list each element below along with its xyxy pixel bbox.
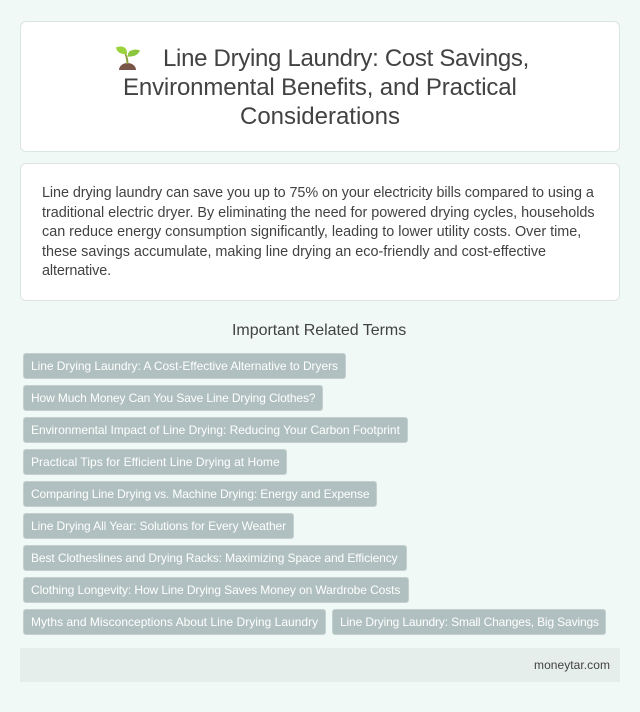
- tag: Environmental Impact of Line Drying: Reducing Your Carbon Footprint: [31, 423, 400, 437]
- tag: Best Clotheslines and Drying Racks: Maximizing Space and Efficiency: [31, 551, 398, 565]
- tag: Myths and Misconceptions About Line Drying Laundry: [31, 615, 318, 629]
- title: Considerations: [240, 103, 400, 130]
- tag: [23, 513, 294, 539]
- tag: [23, 449, 287, 475]
- icon: seedling: [116, 46, 140, 70]
- title: Environmental Benefits, and Practical: [123, 74, 517, 101]
- tag: [332, 609, 606, 635]
- summary text: Line drying laundry can save you up to 75% on your electricity bills compared to using a: [42, 185, 594, 201]
- tag: Clothing Longevity: How Line Drying Saves Money on Wardrobe Costs: [31, 583, 400, 597]
- summary card: [20, 163, 620, 301]
- footer: [20, 648, 620, 682]
- title card: [20, 21, 620, 152]
- summary text: alternative.: [42, 263, 111, 279]
- tag: [23, 609, 326, 635]
- tag: [23, 545, 407, 571]
- section heading: Important Related Terms: [232, 322, 406, 339]
- summary text: traditional electric dryer. By eliminating the need for powered drying cycles, households: [42, 204, 595, 220]
- title: Line Drying Laundry: Cost Savings,: [163, 45, 529, 72]
- footer: moneytar.com: [534, 658, 610, 672]
- summary text: these savings accumulate, making line drying an eco-friendly and cost-effective: [42, 244, 546, 260]
- tag: [23, 481, 377, 507]
- tag: [23, 577, 409, 603]
- summary text: [42, 185, 595, 279]
- tag: Line Drying Laundry: A Cost-Effective Alternative to Dryers: [31, 359, 338, 373]
- tag: [23, 385, 323, 411]
- tag: Line Drying Laundry: Small Changes, Big Savings: [340, 615, 599, 629]
- tag: Comparing Line Drying vs. Machine Drying: Energy and Expense: [31, 487, 369, 501]
- tag: Line Drying All Year: Solutions for Every Weather: [31, 519, 286, 533]
- tag: How Much Money Can You Save Line Drying Clothes?: [31, 391, 315, 405]
- title: [123, 45, 529, 130]
- tag: [23, 353, 346, 379]
- tag: Practical Tips for Efficient Line Drying at Home: [31, 455, 280, 469]
- tag list: [23, 353, 606, 635]
- tag: [23, 417, 408, 443]
- summary text: can reduce energy consumption significantly, leading to lower utility costs. Over time,: [42, 224, 581, 240]
